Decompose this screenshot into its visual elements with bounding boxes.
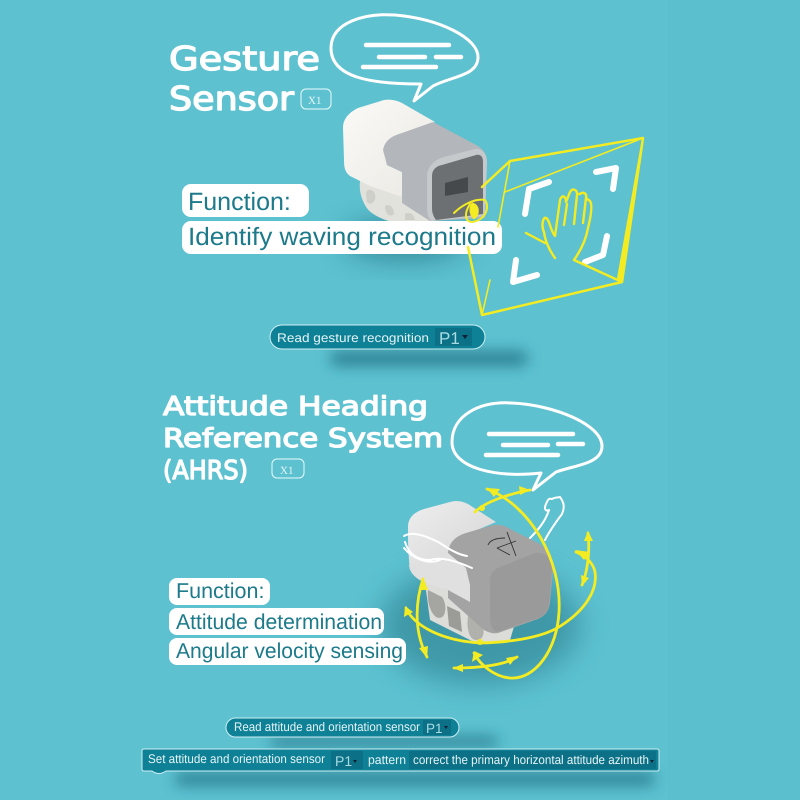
title: Gesture Sensor: Sensor bbox=[169, 79, 294, 118]
title: AHRS: Attitude Heading bbox=[163, 392, 428, 422]
function label box: Function: bbox=[188, 188, 291, 216]
function description box: Identify waving recognition bbox=[188, 223, 496, 251]
quantity badge x1: X1 bbox=[308, 95, 321, 107]
function: angular velocity sensing: Angular velocity sensing bbox=[176, 639, 403, 663]
attitude sensor device bbox=[408, 501, 553, 644]
code block: set attitude pattern: P1 bbox=[335, 753, 352, 769]
code block: set attitude pattern: correct the primary horizontal attitude azimuth bbox=[413, 753, 649, 767]
white corner brackets bbox=[513, 168, 616, 282]
quantity badge x1 bbox=[301, 89, 331, 109]
code block: read gesture recognition: P1 bbox=[439, 329, 460, 348]
function label box bbox=[182, 184, 309, 217]
function: attitude determination: Attitude determination bbox=[176, 610, 382, 634]
panel: gesture sensor bbox=[169, 15, 643, 366]
code block: read gesture recognition bbox=[270, 325, 485, 349]
speech bubble bbox=[331, 15, 478, 101]
code block: read gesture recognition: Read gesture recognition bbox=[277, 331, 429, 345]
code block: read attitude bbox=[226, 718, 459, 737]
title: AHRS: (AHRS) bbox=[163, 456, 248, 486]
yellow arrow heads bbox=[404, 486, 593, 672]
title: AHRS bbox=[163, 392, 443, 486]
yellow rotation arrows bbox=[406, 489, 595, 678]
speech bubble bbox=[452, 403, 602, 490]
yellow gesture detection frame bbox=[454, 138, 643, 315]
title: Gesture Sensor bbox=[169, 39, 320, 118]
code block: set attitude pattern: Set attitude and orientation sensor bbox=[148, 752, 325, 766]
block shadow bbox=[330, 351, 528, 366]
quantity badge x1: X1 bbox=[280, 465, 293, 477]
quantity badge x1 bbox=[272, 459, 304, 478]
function label box: Function: bbox=[176, 579, 264, 603]
code block: read attitude: P1 bbox=[426, 721, 443, 736]
panel: attitude heading reference system bbox=[142, 392, 659, 786]
title: AHRS: Reference System bbox=[163, 424, 443, 454]
code block: set attitude pattern: pattern bbox=[368, 753, 406, 767]
sensor shadow bbox=[380, 565, 580, 685]
title: Gesture Sensor: Gesture bbox=[169, 39, 320, 78]
code block: read attitude: Read attitude and orientation sensor bbox=[234, 720, 420, 734]
code block: set attitude pattern bbox=[142, 749, 659, 774]
block shadows bbox=[175, 736, 655, 786]
icon: yellow hand bbox=[526, 190, 622, 282]
white hand and arm swipe bbox=[404, 497, 564, 568]
gesture sensor device bbox=[343, 100, 487, 222]
sensor shadow bbox=[343, 220, 467, 260]
